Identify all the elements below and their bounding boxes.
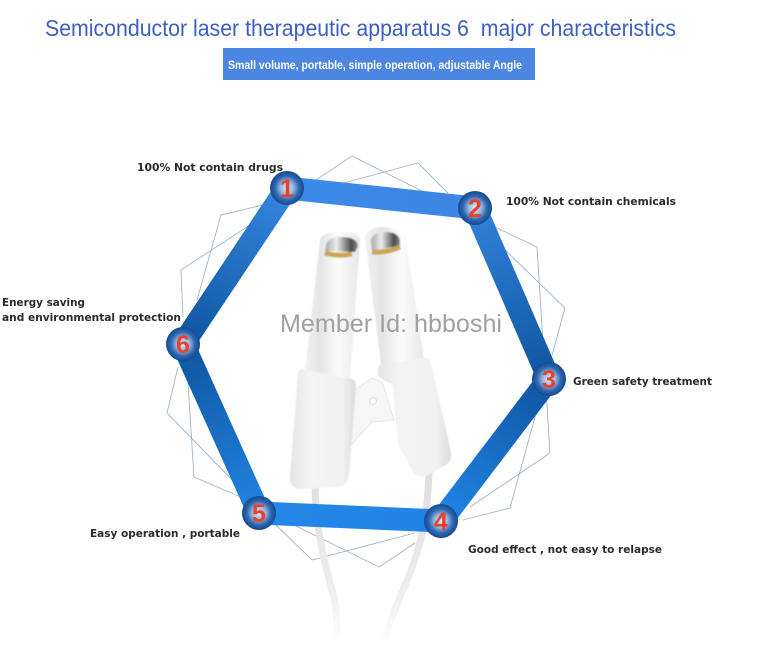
number badge 1 xyxy=(270,171,304,205)
title: Semiconductor laser therapeutic apparatus 6 major characteristics xyxy=(45,15,676,41)
hinge xyxy=(350,378,394,446)
number badge 4 xyxy=(424,504,458,538)
subtitle banner: Small volume, portable, simple operation, adjustable Angle xyxy=(228,58,522,72)
number badge 5 xyxy=(242,496,276,530)
number badge 6 xyxy=(166,327,200,361)
label 1: 100% Not contain drugs xyxy=(137,161,283,174)
label 4: Good effect , not easy to relapse xyxy=(468,543,662,556)
number badge 2: 2 xyxy=(468,195,482,223)
thin decorative hexagon outlines xyxy=(167,156,565,567)
label 2: 100% Not contain chemicals xyxy=(506,195,676,208)
hinge pin xyxy=(370,398,376,404)
number badge 1: 1 xyxy=(280,175,294,203)
label 5: Easy operation , portable xyxy=(90,527,240,540)
right probe xyxy=(365,227,425,372)
right clip body xyxy=(378,358,451,476)
cables xyxy=(315,472,429,644)
device: laser therapy clip with two probes xyxy=(290,227,451,644)
left clip body xyxy=(290,369,356,489)
label 6: and environmental protection xyxy=(2,311,181,324)
label 6 xyxy=(2,296,181,324)
number badge 4: 4 xyxy=(434,508,448,536)
subtitle banner xyxy=(223,48,535,80)
number badge 5: 5 xyxy=(252,500,266,528)
watermark: Member Id: hbboshi xyxy=(280,310,502,338)
number badge 3: 3 xyxy=(542,366,556,394)
number badge 3 xyxy=(532,362,566,396)
label 6: Energy saving xyxy=(2,296,85,309)
left probe xyxy=(305,232,360,378)
bold blue hexagon frame xyxy=(183,188,549,521)
number badge 2 xyxy=(458,191,492,225)
label 3: Green safety treatment xyxy=(573,375,712,388)
number badge 6: 6 xyxy=(176,331,190,359)
